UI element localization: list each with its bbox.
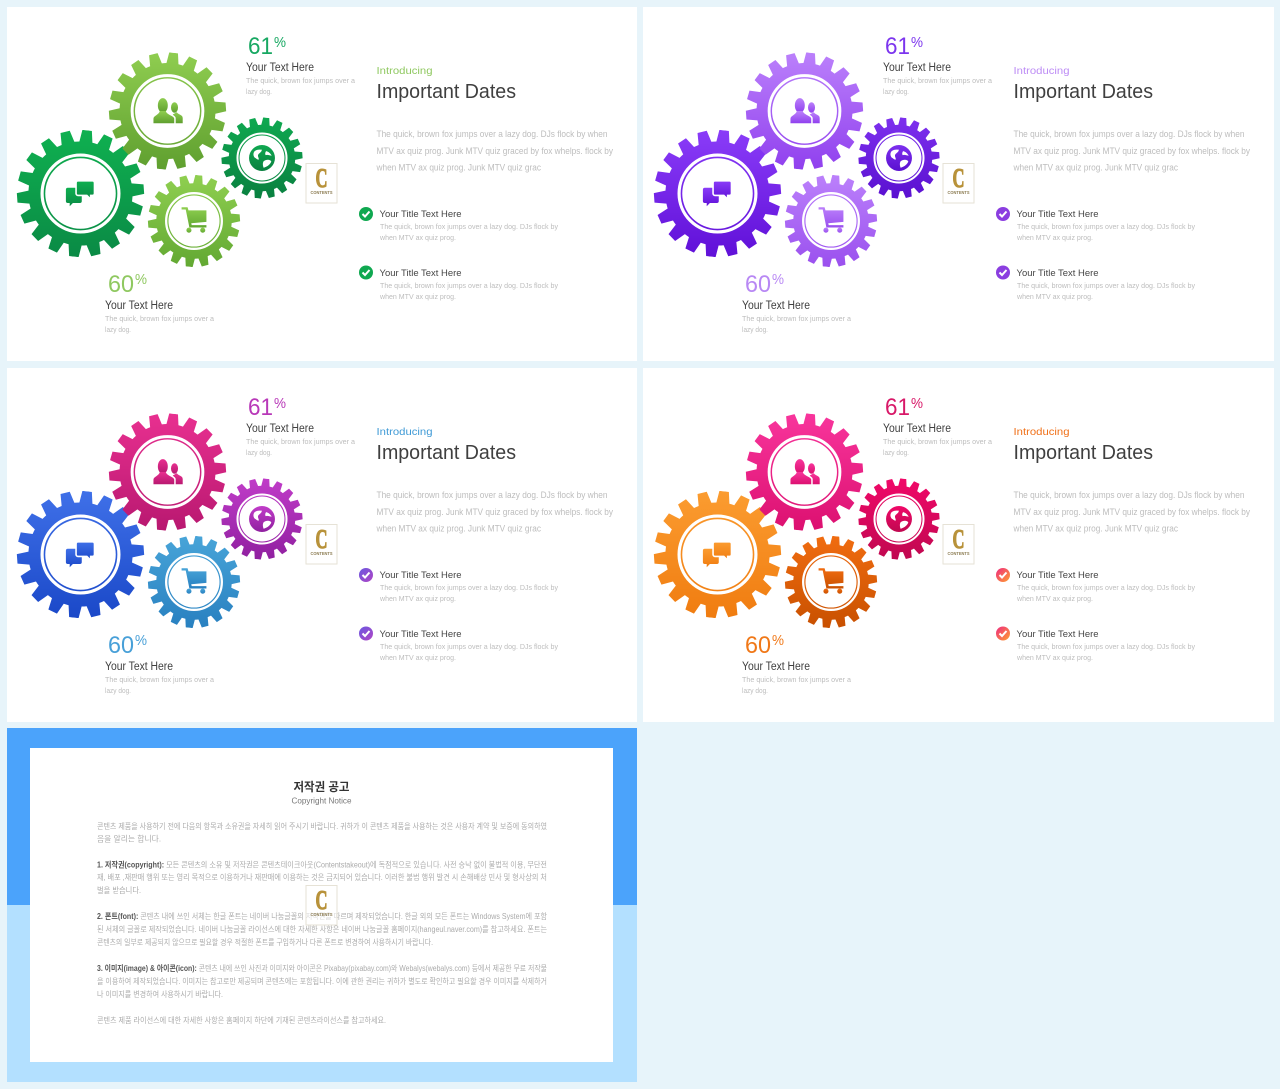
gear: users [705, 34, 904, 188]
notice intro: 콘텐츠 제품을 사용하기 전에 다음의 항목과 소유권을 자세히 읽어 주시기 바랍니다. 귀하가 이 콘텐츠 제품을 사용하는 것은 사용자 계약 및 보증에 동의하였 [97, 821, 548, 831]
stat: 61%: The quick, brown fox jumps over a [883, 437, 992, 446]
logo: CONTENTS [948, 190, 970, 195]
logo: C [316, 163, 328, 193]
stat: 61%: Your Text Here [246, 423, 314, 435]
paragraph: The quick, brown fox jumps over a lazy dog. DJs flock by when [376, 490, 608, 500]
check item 1: when MTV ax quiz prog. [1016, 594, 1093, 603]
logo: CONTENTS [310, 190, 332, 195]
stat: 61%: The quick, brown fox jumps over a [246, 437, 355, 446]
check item 1: Your Title Text Here [380, 209, 462, 220]
notice section 1 [97, 860, 547, 895]
check item 1: Your Title Text Here [1016, 570, 1098, 581]
paragraph: The quick, brown fox jumps over a lazy dog. DJs flock by when [1014, 490, 1245, 500]
notice section 1: 벌을 받습니다. [97, 885, 141, 895]
check item 1: The quick, brown fox jumps over a lazy dog. DJs flock by [1017, 222, 1195, 231]
stat: 60%: lazy dog. [105, 325, 131, 334]
stat: 60%: lazy dog. [742, 325, 768, 334]
stat: 60%: Your Text Here [105, 661, 173, 673]
check item 2: The quick, brown fox jumps over a lazy dog. DJs flock by [380, 281, 558, 290]
heading: Introducing [1014, 426, 1070, 438]
panel: blue and magenta gears [0, 368, 637, 722]
paragraph: when MTV ax quiz prog. Junk MTV quiz grac [1013, 524, 1179, 534]
stat: 60%: lazy dog. [105, 686, 131, 695]
stat: 60% [742, 632, 851, 695]
gear: chat [0, 471, 189, 638]
heading: Introducing [1014, 65, 1070, 77]
stat: 61% [883, 394, 992, 457]
paragraph: when MTV ax quiz prog. Junk MTV quiz grac [376, 162, 542, 172]
paragraph: MTV ax quiz prog. Junk MTV quiz graced by fox whelps. flock by [1014, 507, 1251, 517]
panel: orange and pink gears [609, 368, 1274, 722]
panel: purple gears [609, 7, 1274, 361]
stat: 60% [105, 271, 214, 334]
logo: CONTENTS [310, 912, 332, 917]
stat: 60%: % [772, 271, 784, 288]
check item 2: The quick, brown fox jumps over a lazy dog. DJs flock by [1017, 281, 1195, 290]
stat: 61%: 61 [885, 33, 910, 60]
heading [376, 426, 516, 464]
check item 2 [996, 266, 1195, 301]
stat: 60%: Your Text Here [742, 300, 810, 312]
check item 2: Your Title Text Here [380, 629, 462, 640]
notice section 2: 된 서체의 글꼴로 제작되었습니다. 네이버 나눔글꼴 라이선스에 대한 자세한 사항은 네이버 나눔글꼴 홈페이지(hangeul.naver.com)를 참고하세요. 폰트는 [97, 924, 547, 934]
check item 2: when MTV ax quiz prog. [379, 292, 456, 301]
check item 2: when MTV ax quiz prog. [379, 653, 456, 662]
gear: globe [830, 105, 968, 211]
paragraph [376, 129, 614, 172]
notice section 3: 을 이용하여 제작되었습니다. 이미지는 참고로만 제공되며 콘텐츠에는 포함됩니다. 이에 관한 권리는 귀하가 별도로 확인하고 필요할 경우 이미지를 삭제하거 [97, 976, 547, 986]
stat: 60%: The quick, brown fox jumps over a [105, 314, 214, 323]
heading: Important Dates [1014, 441, 1153, 464]
stat: 60%: 60 [108, 632, 134, 659]
paragraph: The quick, brown fox jumps over a lazy dog. DJs flock by when [376, 129, 608, 139]
check item 1 [359, 207, 558, 242]
heading: Introducing [376, 65, 433, 77]
notice intro [97, 821, 548, 844]
check item 1: The quick, brown fox jumps over a lazy dog. DJs flock by [380, 583, 558, 592]
notice footer: 콘텐츠 제품 라이선스에 대한 자세한 사항은 홈페이지 하단에 기재된 콘텐츠라이선스를 참고하세요. [97, 1015, 386, 1025]
stat: 61%: % [911, 34, 923, 51]
gear: cart [752, 161, 910, 281]
stat: 60% [742, 271, 851, 334]
notice section 1: 재, 배포 ,재판매 행위 또는 영리 목적으로 이용하거나 재판매에 이용하는 것은 금지되어 있습니다. 이러한 불법 행위 발견 시 손해배상 민사 및 형사상의 처 [97, 872, 547, 882]
check item 1: when MTV ax quiz prog. [379, 594, 456, 603]
panel: copyright notice [7, 728, 637, 1082]
paragraph: when MTV ax quiz prog. Junk MTV quiz grac [1013, 162, 1179, 172]
heading [1014, 65, 1153, 103]
stat: 61%: The quick, brown fox jumps over a [883, 76, 992, 85]
check item 1: The quick, brown fox jumps over a lazy dog. DJs flock by [380, 222, 558, 231]
paragraph [376, 490, 614, 534]
check item 2: Your Title Text Here [380, 268, 462, 279]
gear: cart [115, 161, 273, 281]
gear: chat [0, 110, 189, 277]
paragraph: The quick, brown fox jumps over a lazy dog. DJs flock by when [1014, 129, 1245, 139]
logo: CONTENTS [948, 551, 970, 556]
heading: Important Dates [1014, 80, 1153, 103]
paragraph: when MTV ax quiz prog. Junk MTV quiz grac [376, 524, 542, 534]
stat: 60% [105, 632, 214, 695]
notice section 3 [97, 963, 547, 999]
stat: 61%: The quick, brown fox jumps over a [246, 76, 355, 85]
stat: 61%: lazy dog. [246, 448, 272, 457]
check item 1: Your Title Text Here [380, 570, 462, 581]
stat: 60%: lazy dog. [742, 686, 768, 695]
check item 2 [996, 626, 1195, 662]
logo: CONTENTS [310, 551, 332, 556]
logo: C [316, 885, 328, 915]
paragraph [1013, 129, 1251, 172]
stat: 60%: The quick, brown fox jumps over a [105, 675, 214, 684]
stat: 60%: The quick, brown fox jumps over a [742, 675, 851, 684]
heading: Important Dates [376, 441, 516, 464]
stat: 61%: lazy dog. [883, 87, 909, 96]
stat: 60%: 60 [108, 271, 134, 298]
stat: 60%: % [772, 632, 784, 649]
stat: 60%: 60 [745, 632, 771, 659]
notice section 3: 3. 이미지(image) & 아이콘(icon): 콘텐츠 내에 쓰인 사진과 이미지와 아이콘은 Pixabay(pixabay.com)와 Webalys(webalys.com) 등에서 제공한 무료 저작물 [97, 963, 547, 973]
stat: 60%: % [135, 632, 147, 649]
check item 2: The quick, brown fox jumps over a lazy dog. DJs flock by [1017, 642, 1195, 651]
gear: users [68, 34, 267, 188]
logo [943, 163, 974, 203]
stat: 61%: Your Text Here [883, 423, 951, 435]
gear: users [705, 395, 904, 549]
stat: 61%: Your Text Here [246, 62, 314, 74]
stat: 61%: 61 [885, 394, 910, 421]
gear: chat [609, 471, 826, 638]
check item 1: when MTV ax quiz prog. [379, 233, 456, 242]
notice title: 저작권 공고 [294, 779, 350, 794]
stat: 60%: Your Text Here [742, 661, 810, 673]
notice section 1: 1. 저작권(copyright): 모든 콘텐츠의 소유 및 저작권은 콘텐츠테이크아웃(Contentstakeout)에 독점적으로 있습니다. 사전 승낙 없이 불법적 이용, 무단전 [97, 860, 547, 870]
gear: globe [830, 466, 968, 572]
paragraph: MTV ax quiz prog. Junk MTV quiz graced by fox whelps. flock by [376, 146, 614, 156]
stat: 61%: % [274, 34, 286, 51]
heading: Introducing [376, 426, 433, 438]
stat: 60%: The quick, brown fox jumps over a [742, 314, 851, 323]
heading: Important Dates [376, 80, 516, 103]
paragraph [1013, 490, 1251, 534]
stat: 60%: 60 [745, 271, 771, 298]
gear: chat [609, 110, 826, 277]
logo: C [952, 163, 964, 193]
notice intro: 음을 알리는 합니다. [97, 834, 161, 844]
logo: C [316, 524, 328, 554]
gear: globe [193, 105, 331, 211]
stat: 61% [246, 394, 355, 457]
check item 2: when MTV ax quiz prog. [1016, 653, 1093, 662]
stat: 61%: 61 [248, 394, 273, 421]
stat: 61%: Your Text Here [883, 62, 951, 74]
gear: users [68, 395, 267, 549]
logo: C [952, 524, 964, 554]
gear: cart [752, 522, 910, 642]
logo [306, 524, 337, 564]
stat: 61%: % [911, 395, 923, 412]
notice section 2 [97, 911, 548, 947]
stat: 61%: % [274, 395, 286, 412]
check item 1 [996, 568, 1195, 603]
paragraph: MTV ax quiz prog. Junk MTV quiz graced by fox whelps. flock by [376, 507, 614, 517]
stat: 60%: % [135, 271, 147, 288]
check item 1: The quick, brown fox jumps over a lazy dog. DJs flock by [1017, 583, 1195, 592]
check item 2: Your Title Text Here [1016, 629, 1098, 640]
logo [943, 524, 974, 564]
stat: 61%: lazy dog. [246, 87, 272, 96]
check item 2 [359, 266, 558, 301]
check item 2: when MTV ax quiz prog. [1016, 292, 1093, 301]
check item 1 [996, 207, 1195, 242]
stat: 61% [246, 33, 355, 96]
panel: green gears [0, 7, 637, 361]
stat: 60%: Your Text Here [105, 300, 173, 312]
stat: 61%: 61 [248, 33, 273, 60]
heading [1014, 426, 1153, 464]
notice title: Copyright Notice [292, 796, 352, 806]
check item 2 [359, 626, 558, 662]
check item 1: when MTV ax quiz prog. [1016, 233, 1093, 242]
logo [306, 163, 337, 203]
heading [376, 65, 516, 103]
check item 2: Your Title Text Here [1016, 268, 1098, 279]
check item 1 [359, 568, 558, 603]
gear: cart [115, 522, 273, 642]
check item 2: The quick, brown fox jumps over a lazy dog. DJs flock by [380, 642, 558, 651]
notice section 2: 콘텐츠의 일부로 제공되지 않으므로 필요할 경우 적절한 폰트를 구입하거나 다른 폰트로 변경하여 사용하시기 바랍니다. [97, 937, 433, 947]
paragraph: MTV ax quiz prog. Junk MTV quiz graced by fox whelps. flock by [1014, 146, 1251, 156]
notice title [292, 779, 352, 806]
check item 1: Your Title Text Here [1016, 209, 1098, 220]
gear: globe [193, 466, 331, 572]
stat: 61% [883, 33, 992, 96]
stat: 61%: lazy dog. [883, 448, 909, 457]
notice section 3: 나 이미지를 변경하여 사용하시기 바랍니다. [97, 989, 223, 999]
logo [306, 885, 337, 925]
notice section 2: 2. 폰트(font): 콘텐츠 내에 쓰인 서체는 한글 폰트는 네이버 나눔글꼴의 저작권을 따르며 제작되었습니다. 한글 외의 모든 폰트는 Windows System에 포함 [97, 911, 548, 921]
